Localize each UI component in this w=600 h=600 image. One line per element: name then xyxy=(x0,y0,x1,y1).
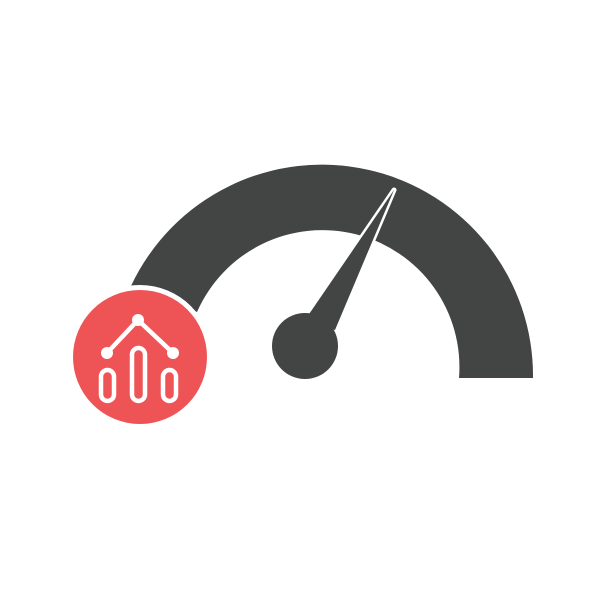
needle xyxy=(272,190,394,379)
icon: chart with nodes xyxy=(101,320,176,401)
badge: red circle with chart icon xyxy=(68,285,212,429)
gauge arc xyxy=(131,165,533,378)
